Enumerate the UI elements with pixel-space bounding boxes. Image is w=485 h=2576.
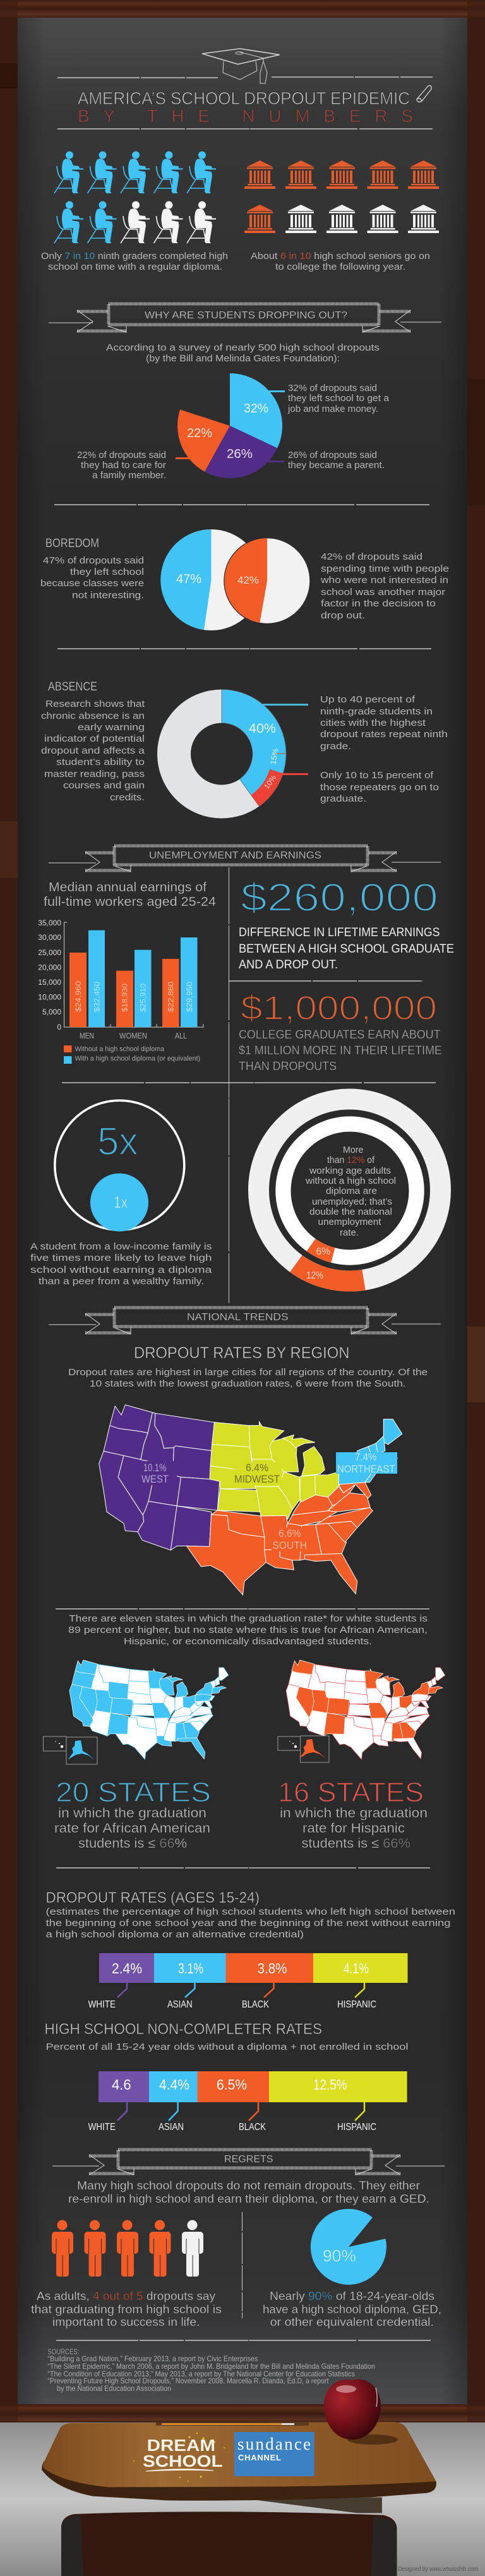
text: boredom right: drop out.: [321, 610, 365, 621]
text: nearly 90 percent: [263, 2290, 441, 2328]
apple: [324, 2380, 398, 2445]
text: absence right bottom: [320, 770, 439, 804]
stacked bar: dropout rates: 3.1%: [178, 1960, 203, 1977]
text: African American rate: [54, 1806, 210, 1851]
icon: chalk: [417, 86, 431, 102]
bar chart: median earnings: $29,950: [185, 982, 194, 1012]
pie chart: 90 percent: 90%: [323, 2246, 356, 2265]
text: Hispanic rate: in which the graduation: [280, 1806, 428, 1821]
text: center of ring: More: [343, 1145, 364, 1155]
text: absence right bottom: those repeaters go on to: [320, 782, 439, 793]
stacked bar: dropout rates: 3.8%: [258, 1960, 287, 1977]
text: college graduates earn: THAN DROPOUTS: [239, 1059, 337, 1073]
sources: SOURCES:: [47, 2347, 79, 2356]
text: graduation rate intro: There are eleven states in which the graduation rate* for white students is: [69, 1613, 428, 1624]
pie chart: reasons for dropping out: 26%: [227, 447, 253, 461]
text: 4 out of 5: As adults, 4 out of 5 dropouts say: [37, 2290, 215, 2302]
heading: dropout rates ages 15-24: DROPOUT RATES (AGES 15-24): [45, 1889, 260, 1906]
stat: 260,000: $260,000: [241, 876, 438, 920]
text: absence left: [41, 699, 145, 803]
text: boredom right: [320, 551, 449, 621]
text: college graduates earn: COLLEGE GRADUATES EARN ABOUT: [239, 1028, 441, 1042]
text: absence right top: cities with the highest: [320, 718, 426, 728]
text: difference in lifetime earnings: [239, 925, 454, 972]
text: non-completer definition: Percent of all 15-24 year olds without a diploma + not enrolled in school: [45, 2042, 408, 2052]
chart: 5x vs 1x circles: 1x: [114, 1193, 128, 1212]
sources: “Preventing Future High School Dropouts,” November 2008, Marcella R. Dianda, Ed.D, a report: [47, 2376, 329, 2385]
stacked bar: non-completer rates: HISPANIC: [337, 2122, 376, 2133]
sources: [47, 2347, 375, 2393]
text: absence left: indicator of potential: [44, 733, 145, 744]
text: boredom left: 47% of dropouts said: [43, 555, 144, 566]
text: difference in lifetime earnings: DIFFERENCE IN LIFETIME EARNINGS: [239, 925, 440, 939]
banner: unemployment and earnings: UNEMPLOYMENT AND EARNINGS: [149, 850, 321, 861]
school desk: [42, 2422, 436, 2576]
logo: Dream School: SCHOOL: [143, 2452, 223, 2471]
map: dropout rates by region: WEST: [141, 1473, 169, 1485]
text: low income family: school without earning a diploma: [30, 1265, 212, 1275]
text: low income family: A student from a low-income family is: [30, 1241, 212, 1252]
pie chart: reasons for dropping out: [176, 373, 285, 478]
text: nearly 90 percent: or other equivalent credential.: [270, 2316, 434, 2328]
stacked bar: non-completer rates: 6.5%: [217, 2076, 247, 2093]
text: Hispanic rate: students is ≤ 66%: [302, 1836, 410, 1851]
text: 32 percent: 32% of dropouts said: [288, 383, 377, 394]
text: center of ring: diploma are: [326, 1186, 377, 1196]
text: 22 percent: [77, 450, 166, 481]
text: absence left: student’s ability to: [56, 757, 145, 767]
sources: “The Condition of Education 2013,” May 2013, a report by The National Center for Education Statistics: [47, 2369, 355, 2378]
logo: Sundance Channel: [234, 2432, 314, 2476]
subtitle: BY THE NUMBERS: [78, 106, 413, 126]
text: dropout rates definition: a high school diploma or an alternative credential): [45, 1929, 304, 1940]
icons: 4 of 5 people: [52, 2220, 203, 2277]
text: absence left: master reading, pass: [44, 769, 145, 779]
heading: median earnings: Median annual earnings of: [49, 881, 207, 894]
text: absence left: Research shows that: [45, 699, 145, 709]
text: absence right top: Up to 40 percent of: [320, 694, 416, 705]
donut chart: absence: 10%: [262, 773, 278, 791]
text: boredom right: who were not interested in: [320, 575, 448, 586]
map: dropout rates by region: MIDWEST: [234, 1473, 280, 1485]
desk support: [251, 2497, 382, 2513]
chart legend: [64, 1045, 200, 1064]
heading: boredom: BOREDOM: [45, 537, 99, 550]
text: boredom right: school was another major: [321, 587, 445, 598]
bar chart: median earnings: 25,000: [38, 948, 61, 957]
bar chart: median earnings: 35,000: [38, 918, 61, 927]
bar chart: median earnings: 10,000: [38, 993, 61, 1002]
text: ninth graders: Only 7 in 10 ninth graders completed high: [41, 251, 228, 262]
pie chart: 90 percent: [311, 2209, 386, 2285]
sources: by the National Education Association: [57, 2384, 171, 2393]
chart: 5x vs 1x circles: [55, 1100, 184, 1232]
text: graduation rate intro: [68, 1613, 428, 1647]
text: absence left: credits.: [110, 792, 145, 803]
text: boredom left: because classes were: [40, 578, 144, 589]
banner: regrets: [52, 2150, 445, 2175]
banner: unemployment and earnings: [49, 846, 441, 872]
pie chart: reasons for dropping out: 32%: [244, 402, 268, 416]
text: absence left: early warning: [78, 722, 145, 733]
map: dropout rates by region: SOUTH: [273, 1539, 307, 1551]
text: college graduates earn: $1 MILLION MORE IN THEIR LIFETIME: [239, 1044, 442, 1057]
bar chart: median earnings: WOMEN: [119, 1031, 147, 1040]
text: boredom right: 42% of dropouts said: [321, 551, 422, 562]
panel: ninth graders icons: [54, 152, 216, 243]
text: center of ring: unemployment: [318, 1217, 381, 1227]
text: center of ring: unemployed; that’s: [312, 1197, 392, 1207]
sources: “Building a Grad Nation,” February 2013, a report by Civic Enterprises: [47, 2354, 258, 2363]
floor: [0, 2423, 485, 2576]
map: dropout rates by region: 6.4%: [246, 1462, 268, 1474]
bar chart: median earnings: 30,000: [38, 933, 61, 942]
text: regrets intro: re-enroll in high school and earn their diploma, or they earn a GED.: [68, 2193, 429, 2205]
stacked bar: dropout rates: [88, 1953, 408, 2010]
stat: 1,000,000: $1,000,000: [241, 989, 437, 1027]
text: ninth graders: school on time with a regular diploma.: [48, 262, 222, 272]
bar chart: median earnings: 0: [57, 1023, 61, 1032]
stacked bar: non-completer rates: 12.5%: [313, 2076, 347, 2093]
chart legend: With a high school diploma (or equivalent): [75, 1055, 200, 1062]
map: Hispanic graduation rates: [278, 1660, 445, 1762]
text: college: About 6 in 10 high school seniors go on: [251, 251, 430, 262]
text: boredom right: factor in the decision to: [321, 598, 436, 609]
heading: dropout rates by region: DROPOUT RATES BY REGION: [134, 1344, 350, 1362]
text: boredom left: they left school: [70, 567, 144, 577]
text: region intro: [68, 1367, 428, 1389]
map: dropout rates by region: 10.1%: [143, 1462, 167, 1474]
bar chart: median earnings: $25,910: [139, 984, 148, 1012]
stacked bar: dropout rates: HISPANIC: [337, 1999, 376, 2010]
logo: Sundance Channel: CHANNEL: [238, 2453, 281, 2462]
text: graduation rate intro: 89 percent or higher, but no state where this is true for African American,: [68, 1625, 428, 1635]
ring chart: unemployment: [259, 1099, 441, 1292]
text: difference in lifetime earnings: BETWEEN A HIGH SCHOOL GRADUATE: [239, 942, 454, 956]
main title: AMERICA’S SCHOOL DROPOUT EPIDEMIC: [78, 88, 410, 108]
bar chart: median earnings: $24,960: [74, 981, 83, 1012]
sources: “The Silent Epidemic,” March 2006, a report by John M. Bridgeland for the Bill and Melinda Gates Foundation: [47, 2362, 375, 2371]
bar chart: median earnings: ALL: [175, 1031, 187, 1040]
stacked bar: non-completer rates: 4.4%: [159, 2076, 189, 2093]
stat: 20 states: 20 STATES: [56, 1777, 211, 1808]
text: nearly 90 percent: Nearly 90% of 18-24-year-olds: [270, 2290, 434, 2302]
pie charts: boredom 47 and 42 percent: 42%: [237, 574, 259, 586]
heading: non-completer rates: HIGH SCHOOL NON-COMPLETER RATES: [44, 2021, 322, 2038]
text: 22 percent: 22% of dropouts said: [77, 450, 166, 460]
bar chart: median earnings: [38, 918, 203, 1064]
map: dropout rates by region: 7.4%: [355, 1451, 376, 1463]
ring chart: unemployment: 12%: [306, 1270, 323, 1281]
text: absence right bottom: Only 10 to 15 percent of: [320, 770, 434, 781]
text: absence right top: [320, 694, 448, 752]
stacked bar: dropout rates: ASIAN: [167, 1999, 193, 2010]
text: boredom right: spending time with people: [321, 563, 449, 574]
donut chart: absence: 40%: [249, 721, 276, 736]
text: absence left: chronic absence is an: [41, 711, 145, 721]
text: low income family: five times more likely to leave high: [30, 1253, 212, 1263]
heading: median earnings: full-time workers aged 25-24: [44, 895, 216, 909]
chart: 5x vs 1x circles: 5x: [97, 1120, 138, 1164]
bar chart: median earnings: MEN: [80, 1031, 94, 1040]
text: 22 percent: a family member.: [92, 470, 166, 481]
text: African American rate: rate for African American: [54, 1821, 210, 1836]
logo: Dream School: [133, 2433, 225, 2482]
donut chart: absence: 15%: [268, 747, 280, 766]
text: center of ring: [305, 1145, 396, 1238]
stacked bar: non-completer rates: 4.6: [112, 2076, 131, 2093]
banner: national trends: NATIONAL TRENDS: [187, 1312, 288, 1323]
banner: regrets: REGRETS: [224, 2154, 273, 2165]
text: 32 percent: job and make money.: [287, 404, 378, 414]
pie charts: boredom 47 and 42 percent: [160, 529, 310, 630]
icon: graduation cap: [202, 49, 280, 83]
pencil: [156, 2423, 309, 2426]
text: survey intro: [106, 342, 380, 364]
text: survey intro: According to a survey of nearly 500 high school dropouts: [106, 342, 380, 353]
text: 26 percent: [288, 450, 385, 471]
text: 26 percent: they became a parent.: [288, 460, 385, 471]
map: dropout rates by region: 6.6%: [278, 1527, 301, 1539]
desk top: [42, 2422, 436, 2501]
stat: 16 states: 16 STATES: [278, 1777, 424, 1808]
map: African American graduation rates: [43, 1660, 229, 1764]
text: survey intro: (by the Bill and Melinda Gates Foundation):: [146, 353, 340, 364]
text: college: to college the following year.: [275, 262, 405, 272]
text: graduation rate intro: Hispanic, or economically disadvantaged students.: [124, 1636, 372, 1647]
bar chart: median earnings: $32,450: [92, 982, 101, 1012]
text: 22 percent: they had to care for: [81, 460, 166, 471]
text: absence right top: ninth-grade students in: [320, 706, 433, 717]
text: center of ring: rate.: [340, 1228, 359, 1238]
banner: national trends: [49, 1308, 441, 1334]
text: center of ring: than 12% of: [327, 1155, 375, 1165]
chart legend: Without a high school diploma: [75, 1045, 165, 1053]
text: 32 percent: they left school to get a: [288, 393, 390, 404]
text: boredom left: [40, 555, 144, 601]
stacked bar: non-completer rates: ASIAN: [159, 2122, 184, 2133]
text: boredom left: not interesting.: [72, 590, 144, 601]
text: ninth graders: [41, 251, 228, 272]
map: dropout rates by region: NORTHEAST: [337, 1463, 395, 1475]
text: absence right bottom: graduate.: [320, 793, 366, 804]
text: low income family: [30, 1241, 212, 1287]
text: absence right top: dropout rates repeat ninth: [320, 729, 448, 740]
text: low income family: than a peer from a wealthy family.: [39, 1276, 204, 1287]
text: 32 percent: [287, 383, 390, 414]
inset: Hawaii and Alaska: [43, 1736, 97, 1764]
text: dropout rates definition: (estimates the percentage of high school students who left high school between: [45, 1906, 455, 1917]
text: college graduates earn: [239, 1028, 442, 1073]
text: regrets intro: Many high school dropouts do not remain dropouts. They either: [77, 2179, 420, 2192]
text: Hispanic rate: rate for Hispanic: [302, 1821, 405, 1836]
heading: median earnings: [44, 881, 216, 909]
text: absence left: courses and gain: [63, 780, 145, 791]
text: regrets intro: [68, 2179, 429, 2205]
bar chart: median earnings: $18,930: [120, 984, 129, 1012]
text: 4 out of 5: [31, 2290, 222, 2328]
text: 4 out of 5: important to success in life.: [52, 2316, 200, 2328]
inset: Hawaii and Alaska: [278, 1736, 329, 1762]
text: center of ring: without a high school: [305, 1176, 396, 1186]
text: African American rate: students is ≤ 66%: [78, 1836, 187, 1851]
donut chart: absence: [174, 690, 308, 806]
stacked bar: dropout rates: 2.4%: [112, 1960, 142, 1977]
pie chart: reasons for dropping out: 22%: [187, 426, 212, 440]
text: center of ring: working age adults: [309, 1166, 391, 1176]
bar chart: median earnings: 5,000: [42, 1008, 61, 1016]
text: 26 percent: 26% of dropouts said: [288, 450, 377, 460]
bar chart: median earnings: 20,000: [38, 963, 61, 972]
text: region intro: 10 states with the lowest graduation rates, 6 were from the South.: [90, 1378, 406, 1389]
banner: why are students dropping out: [49, 304, 441, 332]
text: college: [251, 251, 430, 272]
stacked bar: non-completer rates: WHITE: [88, 2122, 116, 2133]
text: difference in lifetime earnings: AND A DROP OUT.: [239, 958, 338, 972]
ring chart: unemployment: 6%: [316, 1246, 330, 1257]
bar chart: median earnings: 15,000: [38, 978, 61, 987]
text: absence left: dropout and affects a: [41, 745, 145, 756]
map: dropout rates by region: [99, 1405, 402, 1595]
text: African American rate: in which the graduation: [58, 1806, 207, 1821]
text: center of ring: double the national: [309, 1207, 392, 1217]
pie charts: boredom 47 and 42 percent: 47%: [176, 572, 201, 586]
text: 4 out of 5: that graduating from high school is: [31, 2303, 222, 2316]
stacked bar: non-completer rates: [88, 2071, 407, 2133]
heading: absence: ABSENCE: [48, 680, 97, 694]
text: dropout rates definition: the beginning of one school year and the beginning of the next without earning: [45, 1918, 451, 1929]
logo: Sundance Channel: sundance: [237, 2435, 311, 2453]
bar chart: median earnings: $22,860: [167, 982, 176, 1012]
stacked bar: dropout rates: BLACK: [242, 1999, 269, 2010]
text: dropout rates definition: [45, 1906, 455, 1940]
stacked bar: dropout rates: 4.1%: [344, 1960, 369, 1977]
text: nearly 90 percent: have a high school diploma, GED,: [263, 2303, 441, 2316]
text: region intro: Dropout rates are highest in large cities for all regions of the country. Of the: [68, 1367, 428, 1378]
stacked bar: dropout rates: WHITE: [88, 1999, 116, 2010]
title block: [57, 49, 433, 129]
panel: college icons: [244, 160, 439, 233]
text: Hispanic rate: [280, 1806, 428, 1851]
chair back: [61, 2512, 397, 2576]
stacked bar: non-completer rates: BLACK: [239, 2122, 266, 2133]
logo: Dream School: DREAM: [147, 2436, 215, 2455]
banner: why are students dropping out: WHY ARE STUDENTS DROPPING OUT?: [145, 310, 347, 321]
text: absence right top: grade.: [320, 741, 351, 752]
